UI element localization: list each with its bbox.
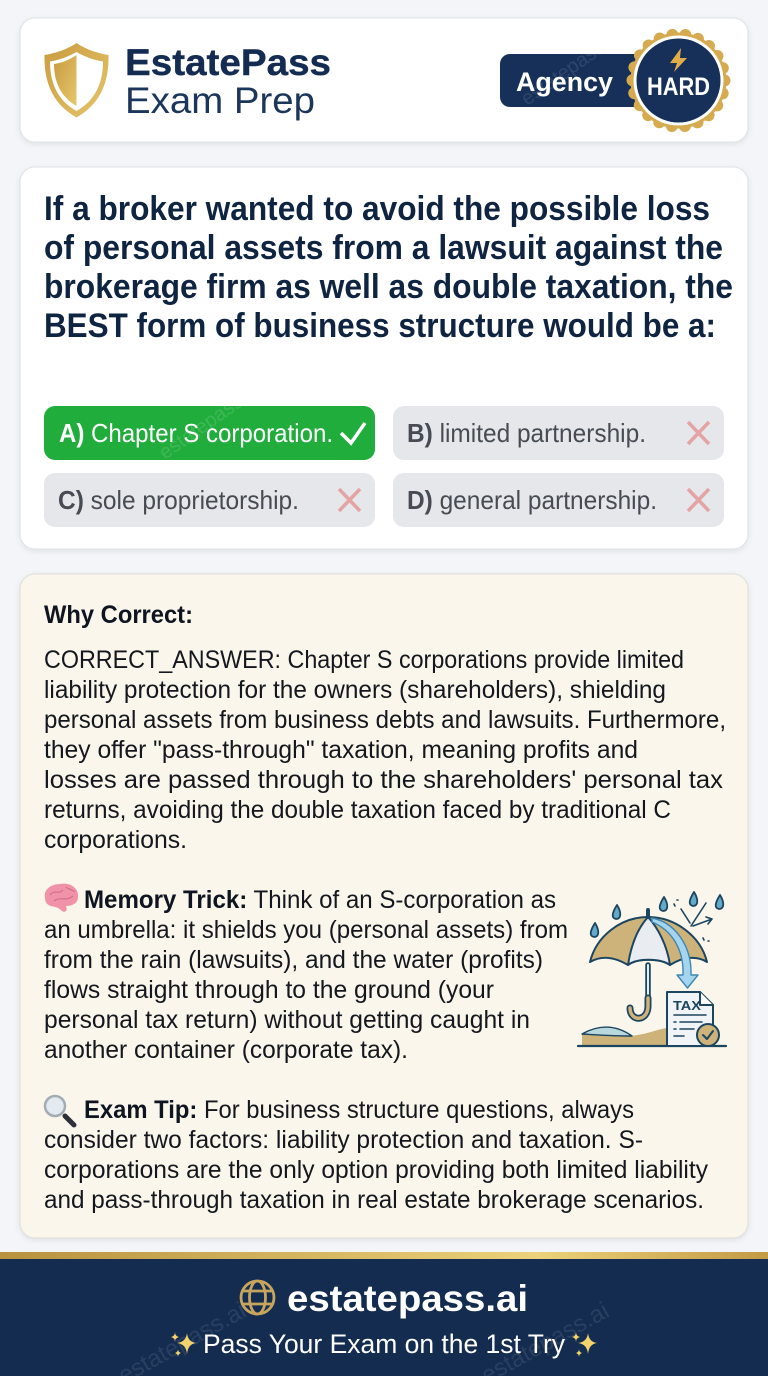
icon: cross <box>339 489 360 511</box>
explanation text: returns, avoiding the double taxation faced by traditional C <box>44 796 671 824</box>
difficulty badge: HARD: HARD <box>647 73 710 101</box>
answer D <box>393 473 724 527</box>
answer B: B) limited partnership. <box>407 418 646 448</box>
umbrella canopy <box>590 910 707 1018</box>
panel: question <box>20 167 748 549</box>
exam tip text: corporations are the only option providing both limited liability <box>44 1156 708 1184</box>
memory trick text: personal tax return) without getting caught in <box>44 1006 530 1034</box>
panel: header <box>20 18 748 142</box>
question text <box>44 190 733 345</box>
explanation text <box>44 646 726 854</box>
panel: explanation <box>20 574 748 1238</box>
memory trick text: Memory Trick: Think of an S-corporation as <box>84 886 556 914</box>
category tag: Agency: Agency <box>516 67 613 97</box>
tax document: TAX <box>673 998 701 1013</box>
answer A correct <box>44 378 375 464</box>
sand and water ground <box>582 1028 668 1045</box>
icon: globe <box>241 1281 274 1314</box>
question text: of personal assets from a lawsuit against the <box>44 229 723 267</box>
question text: BEST form of business structure would be a: <box>44 307 716 345</box>
icon: cross <box>688 489 709 511</box>
splash lines <box>674 900 712 941</box>
question text: brokerage firm as well as double taxation, the <box>44 268 733 306</box>
brand subtitle: Exam Prep <box>125 80 315 121</box>
exam tip text <box>44 1096 708 1214</box>
website name: estatepass.ai <box>287 1278 528 1319</box>
memory trick text: an umbrella: it shields you (personal assets) from <box>44 916 568 944</box>
answer B <box>393 406 724 460</box>
heading: why correct: Why Correct: <box>44 601 193 629</box>
icon: sparkles right <box>572 1332 597 1357</box>
brand name: EstatePass <box>125 42 331 83</box>
icon: magnifying glass <box>45 1096 74 1125</box>
answer D: D) general partnership. <box>407 485 657 515</box>
memory trick text: flows straight through to the ground (your <box>44 976 494 1004</box>
footer <box>0 1252 768 1376</box>
explanation text: personal assets from business debts and lawsuits. Furthermore, <box>44 706 726 734</box>
explanation text: losses are passed through to the shareholders' personal tax <box>44 766 724 794</box>
explanation text: liability protection for the owners (shareholders), shielding <box>44 676 666 704</box>
icon: cross <box>688 422 709 444</box>
exam tip text: Exam Tip: For business structure questions, always <box>84 1096 634 1124</box>
answer A correct: estatepass.ai <box>155 378 264 464</box>
tax document <box>667 992 719 1046</box>
water stream arrow <box>652 918 698 988</box>
answer A correct: A) Chapter S corporation. <box>59 418 333 448</box>
explanation text: corporations. <box>44 826 187 854</box>
icon: gold shield <box>44 43 109 118</box>
answer C: C) sole proprietorship. <box>58 485 299 515</box>
memory trick text <box>44 886 568 1064</box>
exam tip text: consider two factors: liability protection and taxation. S- <box>44 1126 643 1154</box>
icon: brain <box>45 884 78 912</box>
icon: check mark <box>341 423 365 443</box>
raindrops <box>591 892 723 937</box>
icon: sparkles left <box>171 1332 196 1357</box>
answer C <box>44 473 375 527</box>
question text: If a broker wanted to avoid the possible loss <box>44 190 710 228</box>
category tag: Agency: estatepass.ai <box>517 24 626 110</box>
memory trick text: from the rain (lawsuits), and the water (profits) <box>44 946 543 974</box>
tagline: Pass Your Exam on the 1st Try <box>203 1329 565 1359</box>
explanation text: they offer "pass-through" taxation, meaning profits and <box>44 736 638 764</box>
memory trick text: another container (corporate tax). <box>44 1036 408 1064</box>
difficulty badge: HARD <box>630 32 726 128</box>
explanation text: CORRECT_ANSWER: Chapter S corporations provide limited <box>44 646 684 674</box>
icon: umbrella with rain and tax form <box>578 892 726 1046</box>
exam tip text: and pass-through taxation in real estate brokerage scenarios. <box>44 1186 704 1214</box>
icon: lightning bolt <box>670 48 687 72</box>
